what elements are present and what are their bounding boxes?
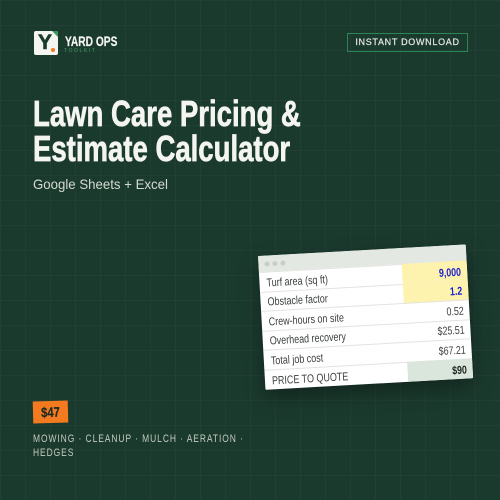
price text: $47 — [41, 403, 60, 420]
row: overhead recovery: Overhead recovery — [270, 332, 347, 348]
row: crew-hours: 0.52 — [446, 305, 464, 318]
row: turf area: 9,000 — [439, 266, 462, 279]
brand name: YARD OPS — [64, 32, 117, 48]
brand subtitle: TOOLKIT — [64, 48, 97, 54]
row: price to quote: $90 — [452, 364, 467, 377]
row: total job cost: $67.21 — [439, 344, 466, 358]
services list: MOWING · CLEANUP · MULCH · AERATION · — [33, 432, 244, 444]
title: Estimate Calculator — [33, 128, 290, 168]
services list: HEDGES — [33, 446, 74, 458]
badge: instant download: INSTANT DOWNLOAD — [355, 37, 460, 47]
price tag — [33, 400, 68, 423]
logo orange dot — [51, 48, 55, 52]
row: obstacle factor — [260, 280, 469, 311]
row: turf area — [259, 260, 468, 292]
logo — [34, 31, 58, 55]
row: crew-hours: Crew-hours on site — [269, 312, 345, 328]
row: total job cost — [264, 339, 472, 370]
badge: instant download — [347, 33, 468, 52]
subtitle: Google Sheets + Excel — [33, 176, 168, 192]
services list — [33, 432, 244, 458]
logo letter Y: Y — [38, 31, 52, 54]
title — [33, 93, 301, 168]
row: price to quote: PRICE TO QUOTE — [272, 371, 349, 387]
logo green corner — [52, 31, 58, 37]
spreadsheet card — [258, 244, 473, 389]
row: obstacle factor: Obstacle factor — [268, 293, 328, 309]
window title bar — [258, 244, 467, 272]
title: Lawn Care Pricing & — [33, 93, 301, 134]
row: crew-hours — [261, 299, 470, 331]
row: turf area: Turf area (sq ft) — [266, 274, 329, 289]
row: obstacle factor: 1.2 — [450, 286, 463, 298]
row: overhead recovery: $25.51 — [437, 325, 465, 338]
row: overhead recovery — [262, 319, 471, 350]
row: total job cost: Total job cost — [271, 352, 324, 367]
row: price to quote — [265, 358, 473, 389]
